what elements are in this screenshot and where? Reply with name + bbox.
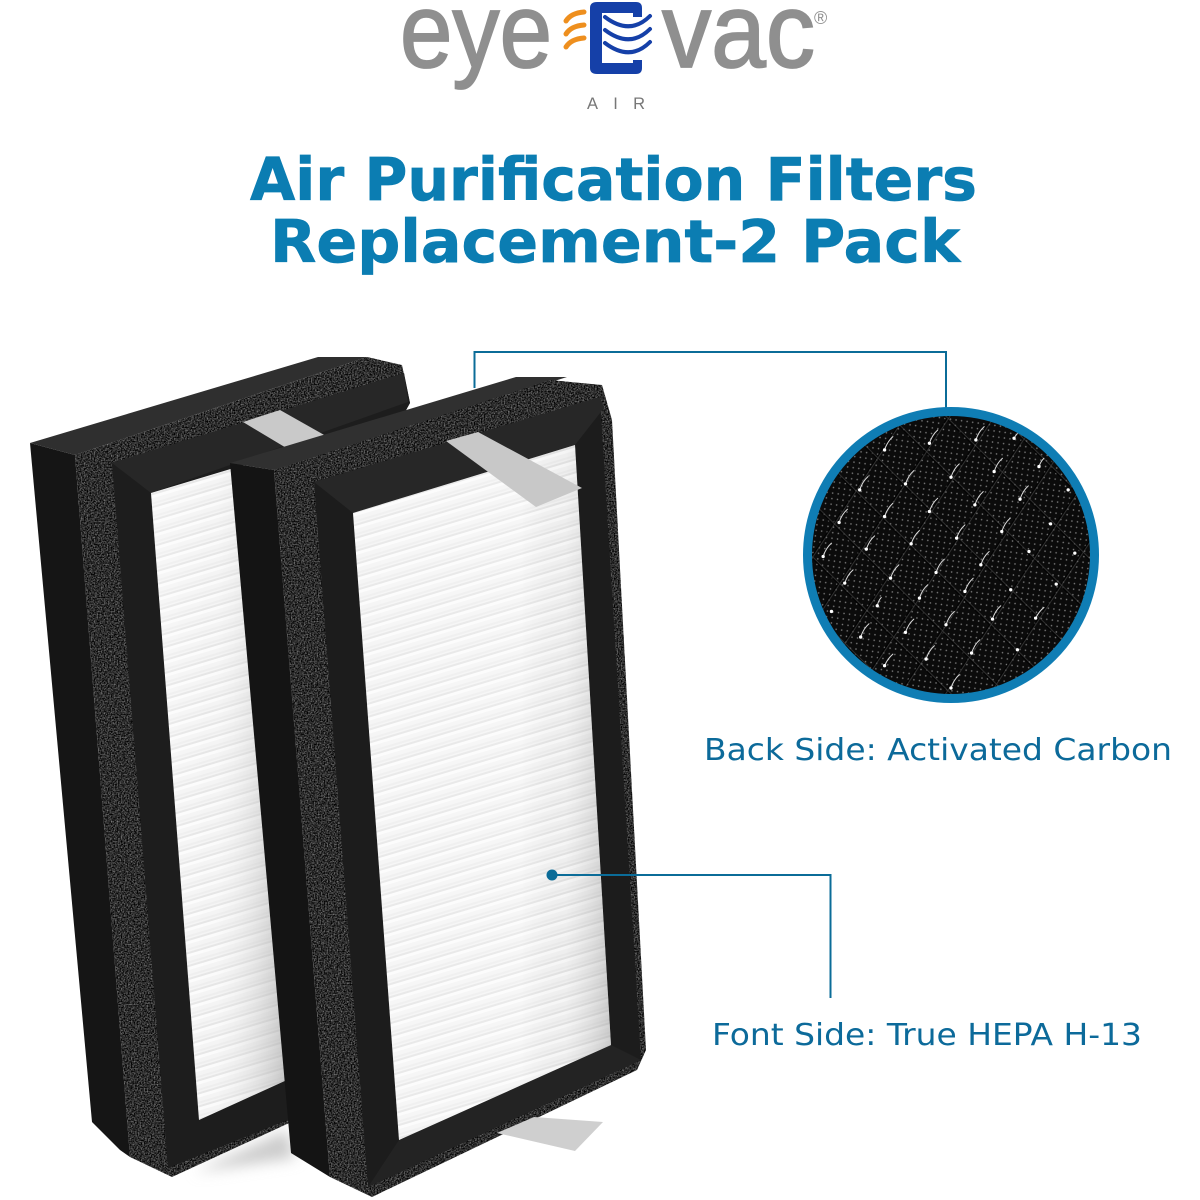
pull tape xyxy=(243,410,326,449)
front frame xyxy=(314,397,641,1187)
label: back side: Back Side: Activated Carbon xyxy=(704,733,1172,768)
soft ground shadow xyxy=(195,1130,295,1172)
white HEPA media xyxy=(353,445,611,1140)
left filter xyxy=(30,357,410,1177)
blue ring xyxy=(808,412,1094,698)
white HEPA media xyxy=(151,448,300,1120)
logo sub text: air: AIR xyxy=(587,95,645,113)
carbon close-up circle xyxy=(808,412,1094,698)
title xyxy=(250,145,977,276)
top pull tape xyxy=(446,432,582,507)
top face xyxy=(230,377,567,470)
side panel xyxy=(230,463,330,1177)
title: Replacement-2 Pack xyxy=(270,207,962,276)
front frame xyxy=(112,373,410,1168)
registered mark: ® xyxy=(814,8,827,28)
icon: orange air swooshes xyxy=(566,12,584,47)
carbon texture xyxy=(810,414,1092,696)
side panel xyxy=(30,443,130,1157)
icon: blue filter mark xyxy=(590,2,650,74)
connector: top callout line xyxy=(474,352,946,408)
foam layer xyxy=(75,357,410,1177)
foam layer xyxy=(274,380,646,1197)
connector: HEPA callout line with dot xyxy=(546,870,830,998)
white fibre streaks xyxy=(823,427,1075,688)
label: front side: Font Side: True HEPA H-13 xyxy=(712,1018,1142,1053)
right filter xyxy=(230,377,646,1197)
logo: eyevac air xyxy=(400,0,827,113)
title: Air Purification Filters xyxy=(250,145,977,214)
bottom pull tape xyxy=(497,1117,603,1151)
top face xyxy=(30,357,367,455)
